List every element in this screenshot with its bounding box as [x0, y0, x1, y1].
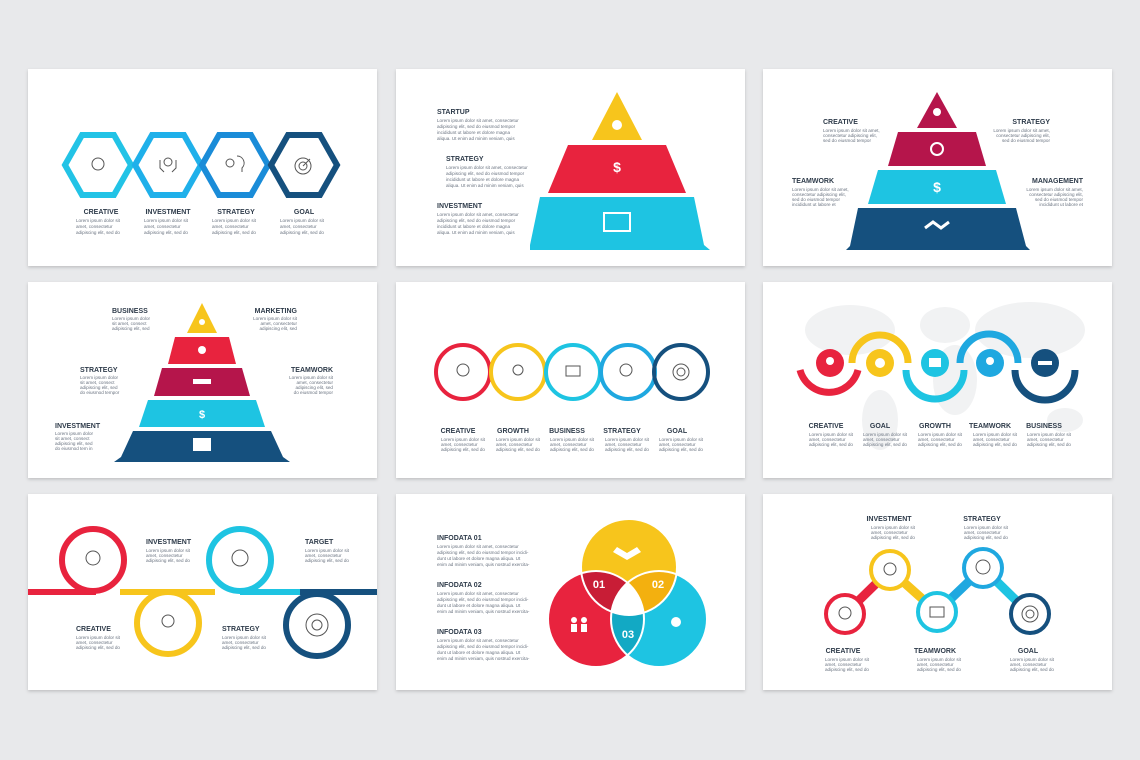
- panel: 5-level pyramid: INVESTMENT: [55, 423, 101, 430]
- panel: looping line: amet, consectetur: [146, 553, 183, 558]
- panel: circle chain: amet, consectetur: [605, 442, 642, 447]
- panel: wave timeline with world map: BUSINESS: [1026, 423, 1062, 430]
- panel: hexagon steps: amet, consectetur: [144, 224, 181, 229]
- panel: zigzag circles: adipiscing elit, sed do: [1010, 667, 1054, 672]
- panel: hexagon steps: Lorem ipsum dolor sit: [280, 218, 325, 223]
- panel: wave timeline with world map: TEAMWORK: [969, 423, 1011, 430]
- panel: zigzag circles: INVESTMENT: [866, 516, 912, 523]
- panel: wave timeline with world map: GOAL: [870, 423, 891, 430]
- panel: looping line: [28, 529, 377, 656]
- panel: venn diagram: 03: [622, 629, 634, 641]
- panel: wave timeline with world map: amet, consectetur: [863, 437, 900, 442]
- panel: wave timeline with world map: adipiscing elit, sed do: [863, 442, 907, 447]
- panel: 3-level pyramid: adipiscing elit, sed do eiusmod tempor: [446, 171, 525, 176]
- panel: hexagon steps: amet, consectetur: [212, 224, 249, 229]
- panel: venn diagram: INFODATA 01: [437, 535, 482, 542]
- panel: 5-level pyramid: do eiusmod tempor: [294, 390, 333, 395]
- panel: zigzag circles: adipiscing elit, sed do: [917, 667, 961, 672]
- panel: 4-level pyramid: consectetur adipiscing elit,: [792, 192, 846, 197]
- panel: venn diagram: Lorem ipsum dolor sit amet, consectetur: [437, 638, 519, 643]
- panel: looping line: CREATIVE: [76, 626, 111, 633]
- panel: zigzag circles: Lorem ipsum dolor sit: [871, 525, 916, 530]
- slide backgrounds: [28, 69, 1112, 690]
- panel: wave timeline with world map: Lorem ipsum dolor sit: [809, 432, 854, 437]
- panel: hexagon steps: Lorem ipsum dolor sit: [212, 218, 257, 223]
- panel: 5-level pyramid: adipiscing elit, sed: [112, 326, 150, 331]
- panel: 5-level pyramid: do eiusmod tempor: [80, 390, 120, 395]
- panel: looping line: amet, consectetur: [222, 640, 259, 645]
- panel: 4-level pyramid: sed do eiusmod tempor: [1035, 197, 1083, 202]
- panel: 5-level pyramid: adipiscing elit, sed: [80, 385, 118, 390]
- panel: looping line: Lorem ipsum dolor sit: [146, 548, 191, 553]
- panel: zigzag circles: adipiscing elit, sed do: [825, 667, 869, 672]
- panel: 4-level pyramid: [792, 92, 1084, 250]
- panel: zigzag circles: amet, consectetur: [964, 530, 1001, 535]
- panel: looping line: amet, consectetur: [76, 640, 113, 645]
- panel: circle chain: [436, 345, 708, 452]
- panel: venn diagram: enim ad minim veniam, quis nostrud exercita-: [437, 656, 530, 661]
- panel: circle chain: Lorem ipsum dolor sit: [496, 437, 541, 442]
- panel: wave timeline with world map: amet, consectetur: [918, 437, 955, 442]
- panel: hexagon steps: adipiscing elit, sed do: [212, 230, 256, 235]
- panel: looping line: Lorem ipsum dolor sit: [76, 635, 121, 640]
- panel: zigzag circles: Lorem ipsum dolor sit: [917, 657, 962, 662]
- panel: venn diagram: adipiscing elit, sed do eiusmod tempor incidi-: [437, 644, 529, 649]
- panel: venn diagram: enim ad minim veniam, quis nostrud exercita-: [437, 609, 530, 614]
- panel: 5-level pyramid: [55, 303, 334, 462]
- panel: venn diagram: 02: [652, 579, 664, 591]
- panel: 3-level pyramid: incididunt ut labore et dolore magna: [437, 130, 510, 135]
- panel: circle chain: adipiscing elit, sed do: [496, 447, 540, 452]
- panel: 3-level pyramid: Lorem ipsum dolor sit amet, consectetur: [446, 165, 528, 170]
- panel: 5-level pyramid: amet, consectetur: [296, 380, 333, 385]
- panel: circle chain: Lorem ipsum dolor sit: [441, 437, 486, 442]
- panel: venn diagram: dunt ut labore et dolore magna aliqua. Ut: [437, 650, 521, 655]
- panel: circle chain: GROWTH: [497, 428, 529, 435]
- panel: 5-level pyramid: sit amet, consect: [55, 436, 90, 441]
- panel: zigzag circles: amet, consectetur: [1010, 662, 1047, 667]
- panel: 4-level pyramid: MANAGEMENT: [1032, 178, 1084, 185]
- panel: 5-level pyramid: Lorem ipsum dolor: [80, 375, 119, 380]
- panel: circle chain: CREATIVE: [441, 428, 476, 435]
- panel: 4-level pyramid: sed do eiusmod tempor: [792, 197, 840, 202]
- panel: venn diagram: adipiscing elit, sed do eiusmod tempor incidi-: [437, 550, 529, 555]
- panel: 3-level pyramid: incididunt ut labore et dolore magna: [446, 177, 519, 182]
- panel: looping line: TARGET: [305, 539, 334, 546]
- panel: venn diagram: INFODATA 02: [437, 582, 482, 589]
- panel: looping line: adipiscing elit, sed do: [76, 645, 120, 650]
- panel: 3-level pyramid: INVESTMENT: [437, 203, 483, 210]
- panel: venn diagram: enim ad minim veniam, quis nostrud exercita-: [437, 562, 530, 567]
- panel: circle chain: Lorem ipsum dolor sit: [659, 437, 704, 442]
- panel: wave timeline with world map: CREATIVE: [809, 423, 844, 430]
- panel: zigzag circles: CREATIVE: [826, 648, 861, 655]
- panel: venn diagram: INFODATA 03: [437, 629, 482, 636]
- panel: hexagon steps: amet, consectetur: [76, 224, 113, 229]
- panel: 4-level pyramid: CREATIVE: [823, 119, 858, 126]
- panel: 3-level pyramid: [437, 92, 710, 250]
- panel: zigzag circles: [825, 516, 1055, 672]
- panel: 5-level pyramid: MARKETING: [255, 308, 298, 315]
- panel: circle chain: STRATEGY: [603, 428, 641, 435]
- panel: 4-level pyramid: Lorem ipsum dolor sit amet,: [1026, 187, 1083, 192]
- panel: wave timeline with world map: Lorem ipsum dolor sit: [973, 432, 1018, 437]
- panel: wave timeline with world map: adipiscing elit, sed do: [809, 442, 853, 447]
- panel: zigzag circles: amet, consectetur: [825, 662, 862, 667]
- panel: circle chain: amet, consectetur: [441, 442, 478, 447]
- panel: 5-level pyramid: STRATEGY: [80, 367, 118, 374]
- panel: hexagon steps: amet, consectetur: [280, 224, 317, 229]
- panel: wave timeline with world map: adipiscing elit, sed do: [918, 442, 962, 447]
- panel: circle chain: GOAL: [667, 428, 688, 435]
- panel: hexagon steps: adipiscing elit, sed do: [144, 230, 188, 235]
- panel: 4-level pyramid: sed do eiusmod tempor: [823, 138, 871, 143]
- panel: zigzag circles: adipiscing elit, sed do: [964, 535, 1008, 540]
- panel: 4-level pyramid: incididunt ut labore et: [1039, 202, 1084, 207]
- panel: looping line: amet, consectetur: [305, 553, 342, 558]
- panel: wave timeline with world map: adipiscing elit, sed do: [1027, 442, 1071, 447]
- panel: 5-level pyramid: BUSINESS: [112, 308, 148, 315]
- panel: hexagon steps: GOAL: [294, 209, 315, 216]
- panel: hexagon steps: CREATIVE: [84, 209, 119, 216]
- panel: wave timeline with world map: Lorem ipsum dolor sit: [918, 432, 963, 437]
- panel: zigzag circles: STRATEGY: [963, 516, 1001, 523]
- panel: venn diagram: Lorem ipsum dolor sit amet, consectetur: [437, 544, 519, 549]
- panel: 3-level pyramid: Lorem ipsum dolor sit amet, consectetur: [437, 118, 519, 123]
- panel: looping line: Lorem ipsum dolor sit: [222, 635, 267, 640]
- panel: 3-level pyramid: aliqua. Ut enim ad minim veniam, quis: [437, 136, 515, 141]
- panel: 5-level pyramid: sit amet, consect: [80, 380, 115, 385]
- panel: 4-level pyramid: consectetur adipiscing elit,: [996, 133, 1050, 138]
- panel: looping line: INVESTMENT: [146, 539, 192, 546]
- panel: hexagon steps: [65, 135, 337, 235]
- panel: 3-level pyramid: $: [613, 159, 621, 175]
- panel: 4-level pyramid: TEAMWORK: [792, 178, 834, 185]
- panel: circle chain: BUSINESS: [549, 428, 585, 435]
- panel: zigzag circles: Lorem ipsum dolor sit: [964, 525, 1009, 530]
- panel: 5-level pyramid: TEAMWORK: [291, 367, 333, 374]
- panel: circle chain: adipiscing elit, sed do: [605, 447, 649, 452]
- panel: circle chain: Lorem ipsum dolor sit: [550, 437, 595, 442]
- panel: 4-level pyramid: Lorem ipsum dolor sit amet,: [993, 128, 1050, 133]
- panel: wave timeline with world map: [800, 302, 1085, 450]
- panel: circle chain: adipiscing elit, sed do: [550, 447, 594, 452]
- panel: 4-level pyramid: consectetur adipiscing elit,: [1029, 192, 1083, 197]
- panel: wave timeline with world map: adipiscing elit, sed do: [973, 442, 1017, 447]
- panel: zigzag circles: GOAL: [1018, 648, 1039, 655]
- panel: circle chain: amet, consectetur: [659, 442, 696, 447]
- panel: zigzag circles: amet, consectetur: [917, 662, 954, 667]
- panel: 3-level pyramid: STARTUP: [437, 109, 470, 116]
- panel: 5-level pyramid: Lorem ipsum dolor: [112, 316, 151, 321]
- panel: wave timeline with world map: amet, consectetur: [1027, 437, 1064, 442]
- panel: circle chain: Lorem ipsum dolor sit: [605, 437, 650, 442]
- panel: 4-level pyramid: consectetur adipiscing elit,: [823, 133, 877, 138]
- panel: 5-level pyramid: $: [199, 409, 205, 421]
- panel: zigzag circles: adipiscing elit, sed do: [871, 535, 915, 540]
- panel: wave timeline with world map: Lorem ipsum dolor sit: [863, 432, 908, 437]
- panel: 3-level pyramid: aliqua. Ut enim ad minim veniam, quis: [437, 230, 515, 235]
- panel: venn diagram: dunt ut labore et dolore magna aliqua. Ut: [437, 603, 521, 608]
- panel: 5-level pyramid: adipiscing elit, sed: [55, 441, 93, 446]
- panel: hexagon steps: adipiscing elit, sed do: [280, 230, 324, 235]
- panel: looping line: adipiscing elit, sed do: [146, 558, 190, 563]
- panel: circle chain: amet, consectetur: [550, 442, 587, 447]
- panel: 3-level pyramid: adipiscing elit, sed do eiusmod tempor: [437, 218, 516, 223]
- panel: 5-level pyramid: Lorem ipsum dolor: [55, 431, 94, 436]
- panel: 3-level pyramid: incididunt ut labore et dolore magna: [437, 224, 510, 229]
- panel: wave timeline with world map: amet, consectetur: [973, 437, 1010, 442]
- panel: 4-level pyramid: Lorem ipsum dolor sit amet,: [792, 187, 849, 192]
- panel: 5-level pyramid: sit amet, consect: [112, 321, 147, 326]
- panel: hexagon steps: INVESTMENT: [145, 209, 191, 216]
- panel: 5-level pyramid: Lorem ipsum dolor sit: [253, 316, 298, 321]
- panel: 5-level pyramid: do eiusmod tem in: [55, 446, 93, 451]
- panel: 5-level pyramid: adipiscing elit, sed: [259, 326, 297, 331]
- panel: 5-level pyramid: amet, consectetur: [260, 321, 297, 326]
- panel: hexagon steps: adipiscing elit, sed do: [76, 230, 120, 235]
- panel: zigzag circles: TEAMWORK: [914, 648, 956, 655]
- panel: 3-level pyramid: Lorem ipsum dolor sit amet, consectetur: [437, 212, 519, 217]
- panel: venn diagram: dunt ut labore et dolore magna aliqua. Ut: [437, 556, 521, 561]
- panel: 4-level pyramid: STRATEGY: [1012, 119, 1050, 126]
- panel: zigzag circles: Lorem ipsum dolor sit: [825, 657, 870, 662]
- panel: looping line: STRATEGY: [222, 626, 260, 633]
- panel: 3-level pyramid: adipiscing elit, sed do eiusmod tempor: [437, 124, 516, 129]
- panel: circle chain: adipiscing elit, sed do: [659, 447, 703, 452]
- panel: circle chain: adipiscing elit, sed do: [441, 447, 485, 452]
- panel: hexagon steps: Lorem ipsum dolor sit: [76, 218, 121, 223]
- panel: venn diagram: Lorem ipsum dolor sit amet, consectetur: [437, 591, 519, 596]
- panel: 4-level pyramid: $: [933, 179, 941, 195]
- panel: looping line: adipiscing elit, sed do: [222, 645, 266, 650]
- panel: 4-level pyramid: incididunt ut labore et: [792, 202, 836, 207]
- panel: wave timeline with world map: amet, consectetur: [809, 437, 846, 442]
- panel: 4-level pyramid: Lorem ipsum dolor sit amet,: [823, 128, 880, 133]
- panel: zigzag circles: amet, consectetur: [871, 530, 908, 535]
- panel: looping line: Lorem ipsum dolor sit: [305, 548, 350, 553]
- panel: looping line: adipiscing elit, sed do: [305, 558, 349, 563]
- panel: venn diagram: adipiscing elit, sed do eiusmod tempor incidi-: [437, 597, 529, 602]
- panel: venn diagram: [437, 519, 707, 667]
- panel: wave timeline with world map: Lorem ipsum dolor sit: [1027, 432, 1072, 437]
- panel: 3-level pyramid: aliqua. Ut enim ad minim veniam, quis: [446, 183, 524, 188]
- panel: wave timeline with world map: GROWTH: [919, 423, 951, 430]
- panel: 4-level pyramid: sed do eiusmod tempor: [1002, 138, 1050, 143]
- panel: 3-level pyramid: STRATEGY: [446, 156, 484, 163]
- panel: venn diagram: 01: [593, 579, 605, 591]
- panel: 5-level pyramid: Lorem ipsum dolor sit: [289, 375, 334, 380]
- panel: 5-level pyramid: adipiscing elit, sed: [295, 385, 333, 390]
- panel: circle chain: amet, consectetur: [496, 442, 533, 447]
- panel: zigzag circles: Lorem ipsum dolor sit: [1010, 657, 1055, 662]
- panel: hexagon steps: STRATEGY: [217, 209, 255, 216]
- panel: hexagon steps: Lorem ipsum dolor sit: [144, 218, 189, 223]
